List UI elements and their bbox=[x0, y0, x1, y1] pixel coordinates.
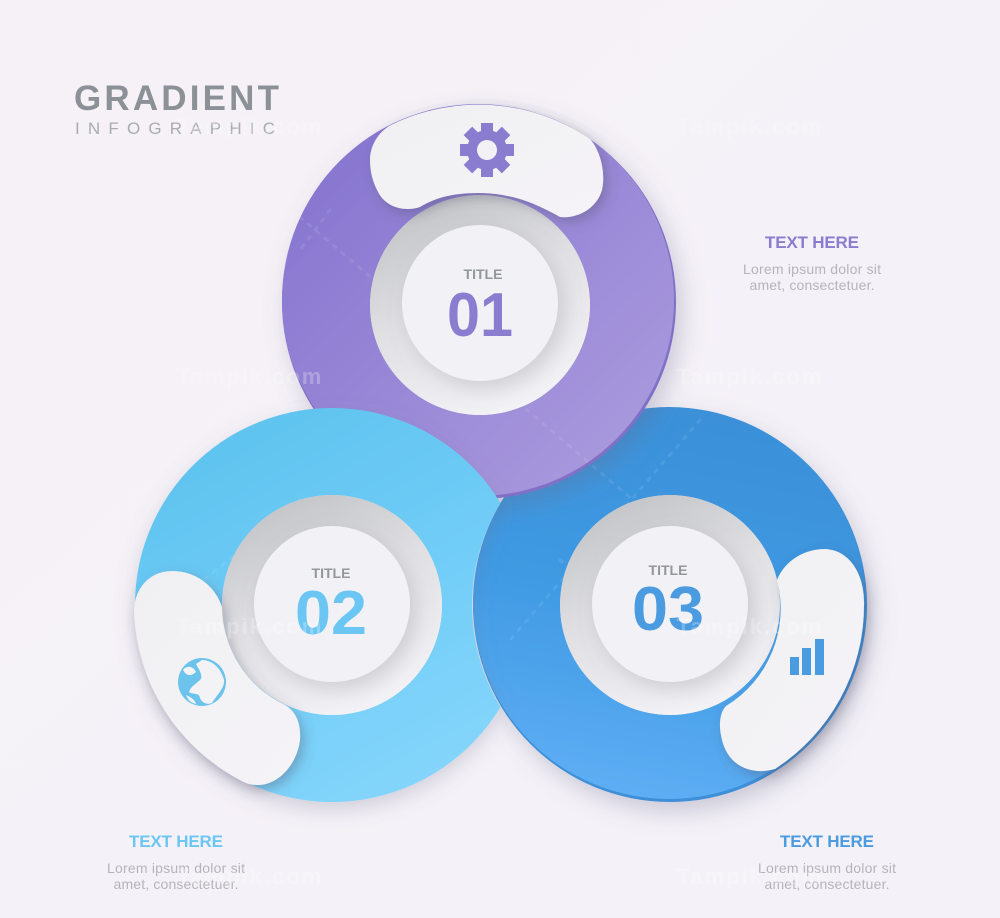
text block 1: TEXT HERE bbox=[765, 233, 859, 252]
text block 1 bbox=[743, 233, 881, 293]
disc 3 label: TITLE bbox=[649, 562, 687, 578]
disc 1 bbox=[402, 225, 558, 381]
watermarks: Tampik.com bbox=[177, 114, 323, 139]
watermarks bbox=[177, 114, 823, 889]
ring 1: purple bbox=[282, 104, 676, 499]
hole 3 bbox=[560, 495, 780, 715]
icon: gear bbox=[460, 123, 514, 177]
text block 3: Lorem ipsum dolor sit bbox=[758, 860, 896, 876]
badge 1 with gear bbox=[370, 105, 603, 217]
ring 2: light blue, cut by ring 3 bbox=[135, 408, 500, 802]
disc 2 bbox=[254, 526, 410, 682]
disc 1 label: TITLE bbox=[464, 266, 502, 282]
title bbox=[74, 79, 279, 138]
text block 2: amet, consectetuer. bbox=[114, 876, 238, 892]
text block 2 bbox=[107, 832, 245, 892]
icon: globe bbox=[178, 658, 226, 706]
watermarks: Tampik.com bbox=[177, 364, 323, 389]
text block 3 bbox=[758, 832, 896, 892]
watermarks: Tampik.com bbox=[177, 614, 323, 639]
text block 3: amet, consectetuer. bbox=[764, 876, 890, 892]
number 02: 02 bbox=[295, 579, 367, 648]
text block 1: amet, consectetuer. bbox=[750, 277, 874, 293]
badge 2 with globe bbox=[134, 571, 300, 785]
ring 3: dark blue bbox=[473, 407, 867, 802]
icon: bar chart bbox=[790, 639, 824, 675]
text block 2: TEXT HERE bbox=[129, 832, 223, 851]
disc 3 bbox=[592, 526, 748, 682]
watermarks: Tampik.com bbox=[677, 114, 823, 139]
hole 1 bbox=[370, 195, 590, 415]
dotted lattice bbox=[180, 210, 720, 680]
text block 3: TEXT HERE bbox=[780, 832, 874, 851]
text block 2: Lorem ipsum dolor sit bbox=[107, 860, 245, 876]
watermarks: Tampik.com bbox=[677, 614, 823, 639]
title: GRADIENT bbox=[74, 79, 279, 118]
hole 2 bbox=[222, 495, 442, 715]
number 03: 03 bbox=[632, 575, 704, 644]
watermarks: Tampik.com bbox=[177, 864, 323, 889]
text block 1: Lorem ipsum dolor sit bbox=[743, 261, 881, 277]
badge 3 with bars bbox=[720, 549, 864, 771]
watermarks: Tampik.com bbox=[677, 864, 823, 889]
watermarks: Tampik.com bbox=[677, 364, 823, 389]
number 01: 01 bbox=[447, 281, 513, 350]
title: INFOGRAPHIC bbox=[75, 119, 275, 138]
disc 2 label: TITLE bbox=[312, 565, 350, 581]
